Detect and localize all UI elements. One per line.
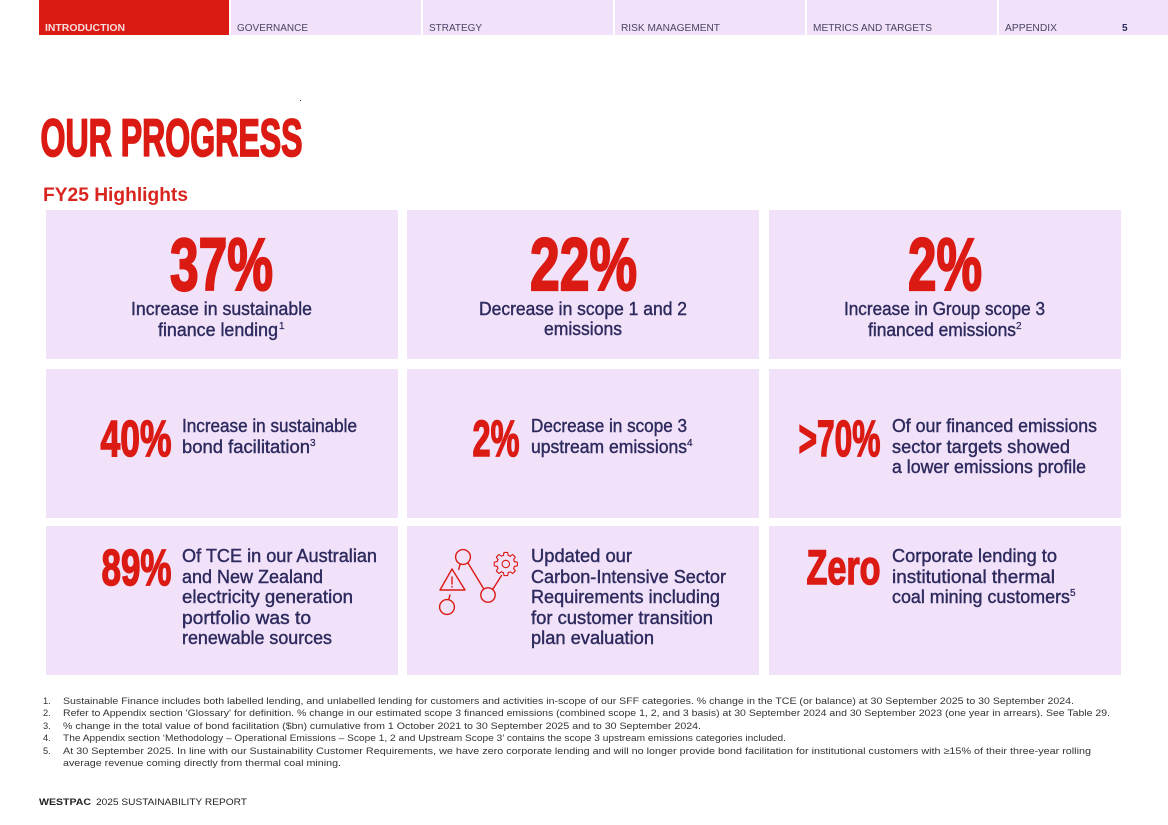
panel: 89% renewable sources xyxy=(46,526,398,675)
tab: risk management: RISK MANAGEMENT xyxy=(621,23,720,34)
panel: >70% sector targets: a lower emissions profile xyxy=(892,457,1086,477)
panel: carbon-intensive sector requirements: Updated our xyxy=(531,546,632,566)
footnotes: % change in the total value of bond facilitation ($bn) cumulative from 1 October 2021 to 30 September 2025 and to 30 September 2024. xyxy=(63,721,701,731)
panel: 2% group scope 3 financed emissions: Increase in Group scope 3 xyxy=(844,299,1045,319)
title: OUR PROGRESS xyxy=(40,109,302,168)
panel: 40% bond facilitation: Increase in sustainable xyxy=(182,416,357,436)
panel: zero thermal coal lending xyxy=(769,526,1121,675)
panel: 2% scope 3 upstream emissions: upstream emissions xyxy=(531,437,687,457)
footnotes: 3. xyxy=(43,721,51,731)
panel: 37% sustainable finance lending xyxy=(46,210,398,359)
panel: 2% group scope 3 financed emissions xyxy=(769,210,1121,359)
panel: zero thermal coal lending: institutional thermal xyxy=(892,567,1055,587)
footnotes: The Appendix section ‘Methodology – Operational Emissions – Scope 1, 2 and Upstream Scope 3’ contains the scope 3 upstream emissions categories included. xyxy=(63,733,786,743)
panel: 89% renewable sources: electricity generation xyxy=(182,587,353,607)
panel: 22% scope 1 and 2 emissions xyxy=(407,210,759,359)
tab: appendix with page number: APPENDIX xyxy=(1005,23,1057,34)
footer: WESTPAC xyxy=(39,797,91,808)
panel: zero thermal coal lending: Zero xyxy=(806,542,880,595)
panel: carbon-intensive sector requirements: Requirements including xyxy=(531,587,720,607)
panel: carbon-intensive sector requirements: for customer transition xyxy=(531,608,713,628)
panel: 22% scope 1 and 2 emissions: Decrease in scope 1 and 2 xyxy=(479,299,687,319)
panel: 40% bond facilitation xyxy=(46,369,398,518)
panel: 2% scope 3 upstream emissions xyxy=(407,369,759,518)
tab: risk management xyxy=(615,0,805,35)
panel: zero thermal coal lending: 5 xyxy=(1070,588,1076,599)
footnotes: Sustainable Finance includes both labelled lending, and unlabelled lending for customers and activities in-scope of our SFF categories. % change in the TCE (or balance) at 30 September 2025 to 30 September 2024. xyxy=(63,696,1074,706)
panel: 2% scope 3 upstream emissions: 2% xyxy=(472,410,520,467)
panel: 37% sustainable finance lending: 37% xyxy=(170,223,273,306)
navigation bar xyxy=(39,0,1168,35)
panel: 37% sustainable finance lending: finance lending xyxy=(158,320,278,340)
panel: 37% sustainable finance lending: 1 xyxy=(279,321,285,332)
icon: risk network with warning triangle and gear xyxy=(440,550,517,614)
footnotes: Refer to Appendix section 'Glossary' for definition. % change in our estimated scope 3 financed emissions (combined scope 1, 2, and 3 basis) at 30 September 2024 and 30 September 2023 (one year in arrears). See Table 29. xyxy=(63,708,1110,718)
footer: 2025 SUSTAINABILITY REPORT xyxy=(96,797,247,808)
tab: governance: GOVERNANCE xyxy=(237,23,308,34)
panel: 2% scope 3 upstream emissions: Decrease in scope 3 xyxy=(531,416,687,436)
panel: 2% group scope 3 financed emissions: financed emissions xyxy=(868,320,1016,340)
panel: carbon-intensive sector requirements: Carbon-Intensive Sector xyxy=(531,567,726,587)
tab: strategy xyxy=(423,0,613,35)
tab: metrics and targets: METRICS AND TARGETS xyxy=(813,23,932,34)
panel: 89% renewable sources: and New Zealand xyxy=(182,567,323,587)
tab: introduction: INTRODUCTION xyxy=(45,23,125,34)
panel: zero thermal coal lending: Corporate lending to xyxy=(892,546,1057,566)
panel: carbon-intensive sector requirements xyxy=(407,526,759,675)
panel: carbon-intensive sector requirements: plan evaluation xyxy=(531,628,654,648)
panel: 2% scope 3 upstream emissions: 4 xyxy=(687,438,693,449)
panel: 89% renewable sources: portfolio was to xyxy=(182,608,311,628)
footnotes: average revenue coming directly from thermal coal mining. xyxy=(63,758,341,768)
panel: 22% scope 1 and 2 emissions: 22% xyxy=(530,223,637,306)
tab: metrics and targets xyxy=(807,0,997,35)
panel: 89% renewable sources: Of TCE in our Australian xyxy=(182,546,377,566)
footnotes: 4. xyxy=(43,733,51,743)
footnotes: 2. xyxy=(43,708,51,718)
panel: 89% renewable sources: renewable sources xyxy=(182,628,332,648)
footnotes: 5. xyxy=(43,746,51,756)
tab: governance xyxy=(231,0,421,35)
panel: zero thermal coal lending: coal mining customers xyxy=(892,587,1070,607)
footer xyxy=(39,797,247,808)
panel: 40% bond facilitation: 40% xyxy=(100,410,172,467)
panel: 37% sustainable finance lending: Increase in sustainable xyxy=(131,299,312,319)
panel: >70% sector targets xyxy=(769,369,1121,518)
subheading: FY25 Highlights xyxy=(43,185,188,206)
tab: strategy: STRATEGY xyxy=(429,23,482,34)
panel: 89% renewable sources: 89% xyxy=(102,539,172,596)
tab: appendix with page number xyxy=(999,0,1168,35)
footnotes: At 30 September 2025. In line with our Sustainability Customer Requirements, we have zero corporate lending and will no longer provide bond facilitation for institutional customers with ≥15% of their three-year rolling xyxy=(63,746,1091,756)
panel: 22% scope 1 and 2 emissions: emissions xyxy=(544,319,622,339)
tab: appendix with page number: 5 xyxy=(1122,23,1128,34)
panel: >70% sector targets: Of our financed emissions xyxy=(892,416,1097,436)
panel: 40% bond facilitation: bond facilitation xyxy=(182,437,310,457)
panel: >70% sector targets: sector targets showed xyxy=(892,437,1070,457)
panel: 40% bond facilitation: 3 xyxy=(310,438,316,449)
tab: introduction xyxy=(39,0,229,35)
panel: >70% sector targets: >70% xyxy=(798,410,880,467)
footnotes: 1. xyxy=(43,696,51,706)
footnotes xyxy=(43,696,1110,768)
panel: 2% group scope 3 financed emissions: 2% xyxy=(908,223,982,306)
panel: 2% group scope 3 financed emissions: 2 xyxy=(1016,321,1022,332)
